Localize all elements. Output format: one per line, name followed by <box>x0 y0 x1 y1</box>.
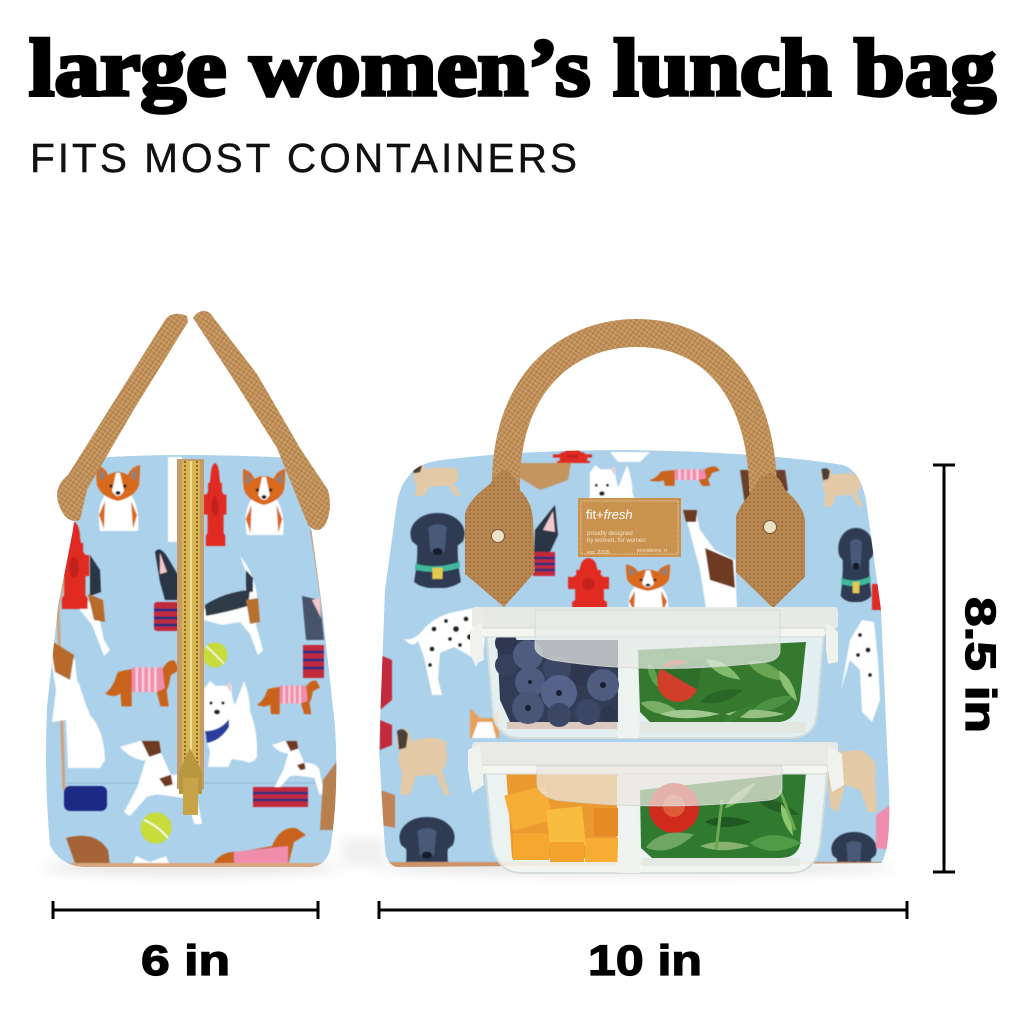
blueberries <box>495 632 619 729</box>
front view lunch bag <box>370 333 900 894</box>
front handle <box>506 333 763 490</box>
top container lid with clips <box>470 607 838 669</box>
brand label: fit + fresh: providence, ri <box>637 548 667 554</box>
brand label: fit + fresh: fit+fresh <box>586 507 633 522</box>
top glass container: blueberries and salad <box>470 607 838 738</box>
dimension: length 10 in: 10 in <box>588 937 702 985</box>
bottom container lid with clips <box>468 742 844 806</box>
right handle tab with rivet <box>736 473 805 608</box>
bottom container divider <box>617 780 640 873</box>
side bag body with dog print <box>40 450 345 870</box>
bottom salad with tomato <box>640 772 806 866</box>
front bag body with dog print <box>379 450 890 867</box>
brand label: fit + fresh: proudly designed <box>587 531 633 537</box>
mango cubes <box>504 768 618 862</box>
subtitle: FITS MOST CONTAINERS <box>30 135 580 181</box>
bottom container glass bowl <box>485 765 828 873</box>
title: large women’s lunch bag <box>29 22 996 113</box>
side view lunch bag <box>40 311 345 870</box>
dimension: length 10 in <box>379 901 907 985</box>
dimension: height 8.5 in <box>933 465 1004 872</box>
brand label: fit + fresh: est. 2005 <box>587 550 610 556</box>
top salad with tomato <box>638 642 806 733</box>
ground shadows <box>40 838 895 874</box>
dimension: height 8.5 in: 8.5 in <box>956 597 1004 733</box>
brand label: fit + fresh <box>578 498 681 557</box>
dimension: width 6 in: 6 in <box>141 937 230 985</box>
dimension: width 6 in <box>53 901 318 985</box>
gold zipper and pull <box>177 459 204 815</box>
side handle straps <box>57 311 330 530</box>
top container divider <box>618 645 639 738</box>
top container glass bowl <box>486 628 824 738</box>
brand label: fit + fresh: by women, for women <box>587 538 646 544</box>
bottom glass container: mango and salad <box>468 742 844 873</box>
left handle tab with rivet <box>465 470 535 607</box>
